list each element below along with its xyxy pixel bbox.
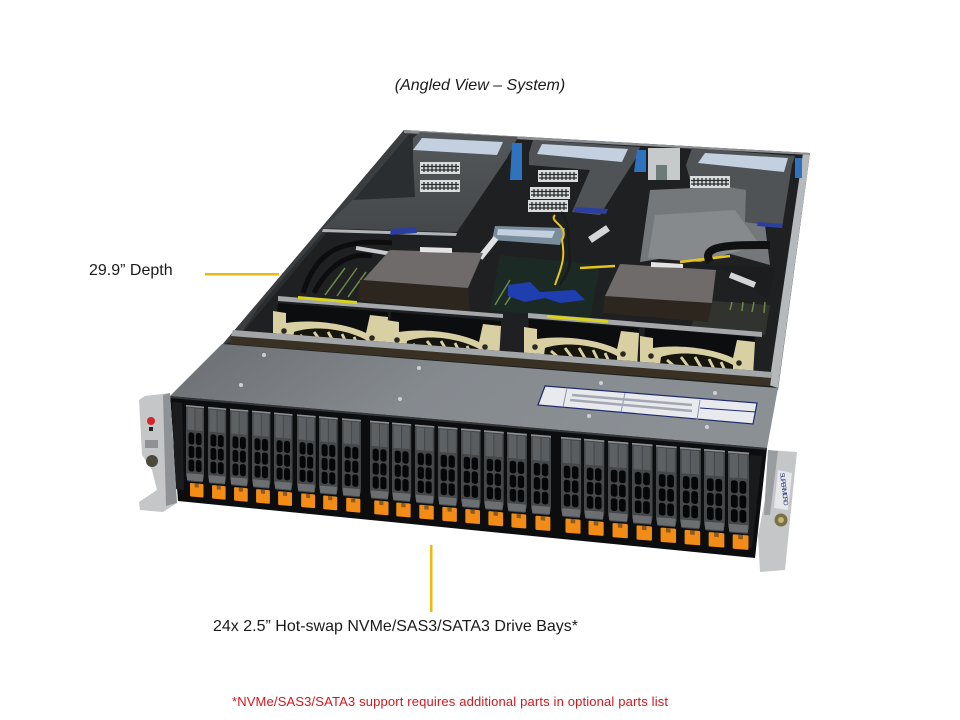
blue retention clips — [508, 282, 585, 303]
drive bays group 2 — [370, 421, 551, 531]
drive bays label: 24x 2.5” Hot-swap NVMe/SAS3/SATA3 Drive Bays* — [213, 618, 578, 635]
centre label plate — [492, 226, 565, 245]
front bezel — [170, 396, 767, 558]
drive bay leader line — [430, 545, 432, 612]
fan row — [273, 296, 762, 376]
air duct right with blue label — [686, 148, 802, 228]
chassis interior — [222, 130, 810, 390]
server illustration — [139, 130, 810, 572]
depth leader line — [205, 273, 279, 276]
heatsink left — [358, 247, 483, 312]
compliance sticker — [538, 386, 757, 424]
cables yellow and black — [303, 212, 770, 293]
air duct centre with blue label — [528, 140, 680, 215]
footnote: *NVMe/SAS3/SATA3 support requires additional parts in optional parts list — [232, 694, 668, 709]
heatsink right — [603, 262, 716, 322]
title: angled view caption: (Angled View – System) — [395, 77, 565, 94]
memory modules — [325, 268, 765, 313]
right rack ear with brand — [758, 450, 797, 572]
depth label: 29.9” Depth — [89, 262, 173, 279]
front cross bar — [230, 330, 772, 386]
drive bays group 1 — [186, 405, 361, 513]
lid — [170, 344, 778, 448]
drive bays group 3 — [561, 437, 749, 550]
right rack ear with brand: SUPERMICRO — [778, 472, 789, 506]
air duct left with blue label — [322, 132, 522, 236]
left rack ear — [139, 393, 177, 512]
